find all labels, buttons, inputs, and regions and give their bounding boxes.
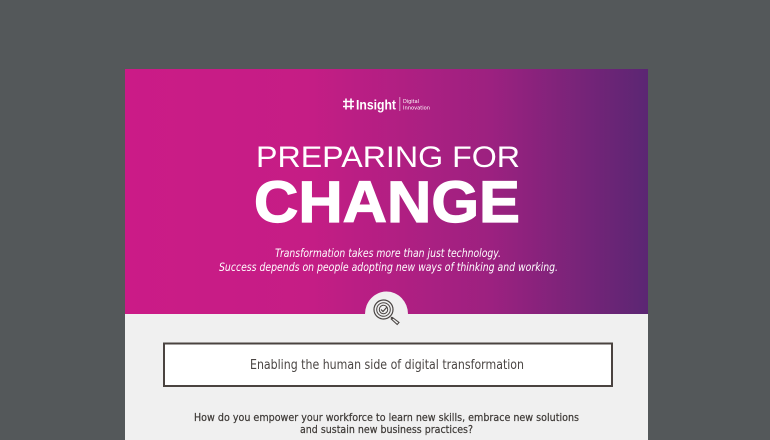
- logo wordmark: Insight: [356, 96, 396, 112]
- question text: and sustain new business practices?: [300, 423, 473, 436]
- panel: gradient header: [125, 69, 648, 314]
- white tab: [365, 292, 408, 314]
- subtitle text: Success depends on people adopting new ways of thinking and working.: [219, 260, 558, 274]
- title: change: CHANGE: [254, 170, 520, 235]
- logo: Insight Digital Innovation: Innovation: [403, 106, 430, 112]
- callout box: [164, 344, 612, 386]
- question text: How do you empower your workforce to learn new skills, embrace new solutions: [194, 411, 579, 424]
- icon: hash mark: [343, 98, 354, 110]
- callout text: Enabling the human side of digital transformation: [250, 358, 524, 373]
- subtitle text: [219, 246, 558, 274]
- question text: [194, 411, 579, 436]
- subtitle text: Transformation takes more than just technology.: [275, 246, 501, 260]
- panel: body background: [125, 314, 648, 440]
- title: preparing for: PREPARING FOR: [256, 141, 520, 174]
- logo descriptor: Digital: [403, 99, 419, 105]
- logo: Insight Digital Innovation: [343, 96, 430, 112]
- icon: magnifying glass in white tab: [365, 292, 408, 324]
